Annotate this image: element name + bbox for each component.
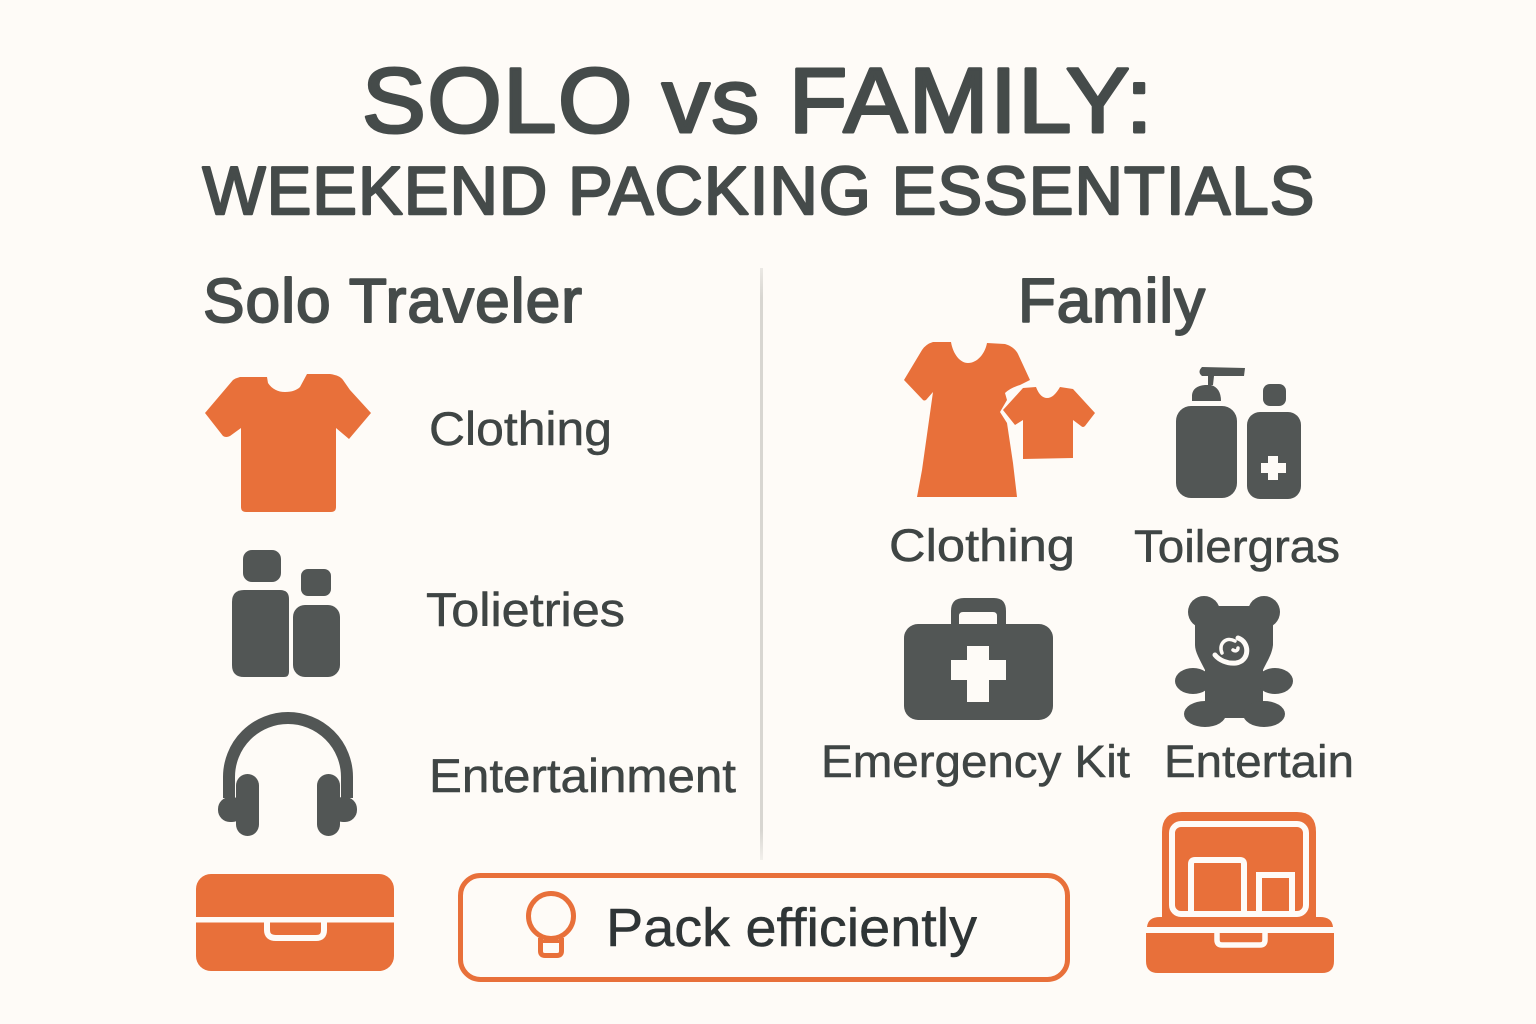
icon: headphones [218,718,357,836]
callout: pack efficiently: Pack efficiently [606,898,977,958]
icon: family toiletries [1176,367,1301,499]
callout: pack efficiently [460,876,1068,980]
icon: solo suitcase [196,874,394,971]
label: solo entertainment: Entertainment [429,749,736,802]
title: WEEKEND PACKING ESSENTIALS [202,153,1316,229]
heading: family: Family [1018,267,1206,336]
heading: solo traveler: Solo Traveler [203,267,583,336]
label: solo clothing: Clothing [429,402,612,455]
icon: emergency kit [904,598,1053,720]
title [202,50,1316,229]
icon: light bulb [528,894,574,956]
label: family toiletries: Toilergras [1134,521,1340,572]
title: SOLO vs FAMILY: [362,50,1154,152]
icon: family clothing [904,342,1095,497]
icon: solo toiletries [232,550,340,677]
icon: solo t-shirt [205,374,371,512]
label: family entertainment: Entertain [1164,736,1354,787]
label: emergency kit: Emergency Kit [821,736,1131,787]
icon: teddy bear [1175,596,1293,727]
icon: family suitcase with tablets [1146,812,1334,973]
label: family clothing: Clothing [889,520,1075,571]
label: solo toiletries: Tolietries [426,583,625,636]
